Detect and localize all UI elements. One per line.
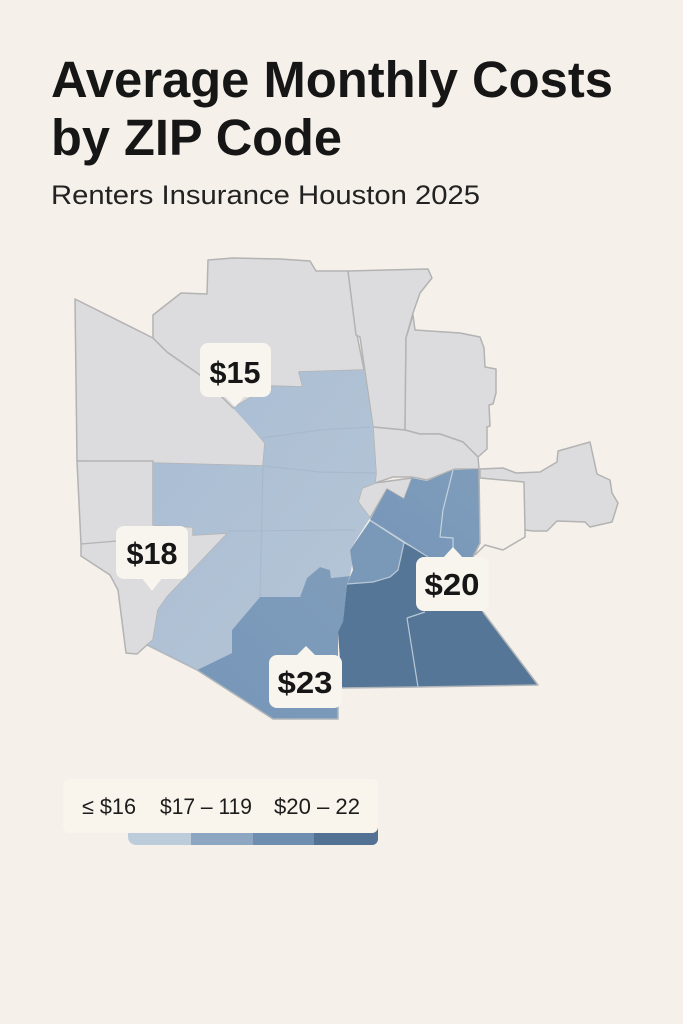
region: north gray (153, 258, 364, 408)
region: southwest gray (77, 461, 228, 654)
region: east gray (405, 315, 496, 457)
callout: $20 (416, 547, 489, 611)
title (51, 51, 613, 166)
region: small bay gray (358, 478, 412, 518)
boundary: northeast inner line (440, 470, 453, 548)
callout: $18 (116, 526, 188, 591)
title: Average Monthly Costs (51, 51, 613, 108)
callout: $20: $20 (424, 567, 480, 602)
title: by ZIP Code (51, 109, 342, 166)
callout: $15: $15 (210, 355, 260, 390)
region: central-east gray (373, 427, 479, 483)
subtitle: Renters Insurance Houston 2025 (51, 180, 480, 210)
region: northeast gray (348, 269, 432, 430)
region: south medium blue (197, 567, 350, 719)
callout: $18: $18 (126, 536, 178, 571)
callout: $23 (269, 646, 342, 708)
region: northeast medium blue (370, 469, 480, 557)
map (75, 258, 618, 719)
region: central light blue (147, 370, 376, 670)
outline: south of far east (475, 530, 525, 555)
legend colour bar (128, 825, 378, 845)
boundaries: dark inner lines (347, 520, 428, 687)
region: southeast dark blue (338, 543, 538, 688)
internal boundaries: central (228, 427, 376, 597)
legend labels: $20 – 22 (274, 794, 360, 819)
legend label panel (63, 779, 378, 833)
callout: $23: $23 (278, 665, 332, 700)
callout: $15 (200, 343, 271, 407)
east edge line (473, 469, 480, 557)
region: bay medium blue (347, 521, 404, 584)
boundary: southwest inner line (81, 538, 153, 544)
region: west gray (75, 299, 265, 466)
region: far east gray (480, 442, 618, 531)
legend (63, 779, 378, 845)
legend labels (82, 794, 360, 819)
legend labels: ≤ $16 (82, 794, 136, 819)
coast outline (147, 612, 538, 719)
legend labels: $17 – 119 (160, 794, 252, 819)
